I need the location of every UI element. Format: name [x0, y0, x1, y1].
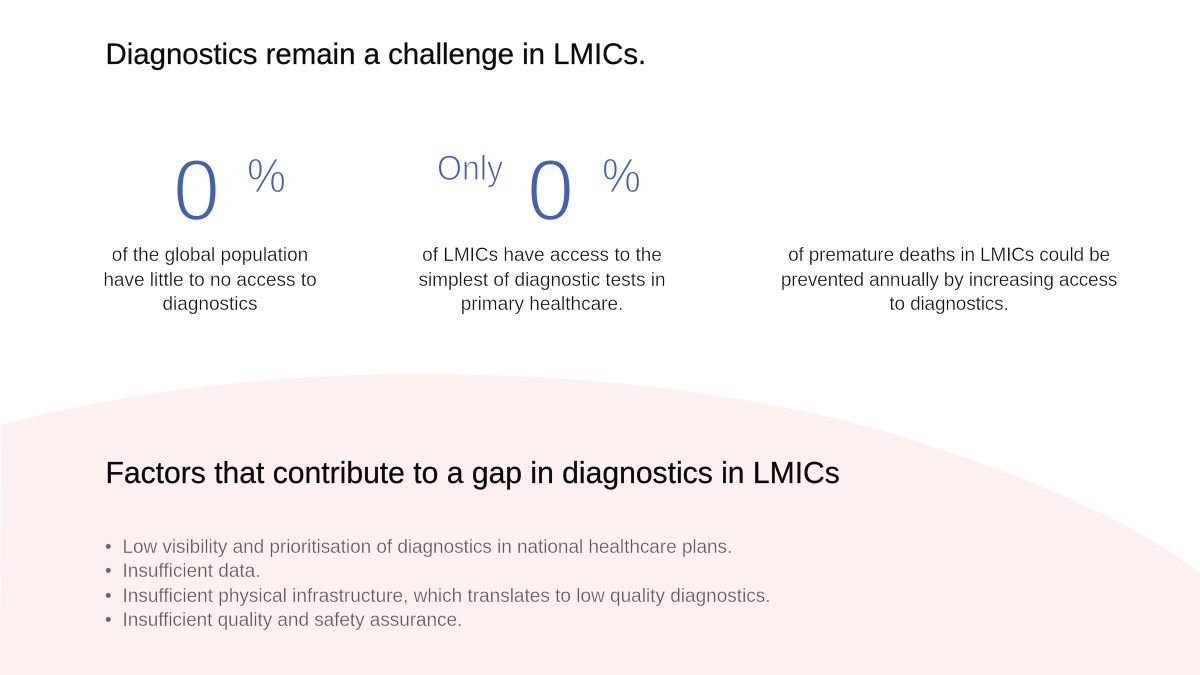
stat 2: caption: of LMICs have access to the	[422, 245, 662, 266]
stat 2: big number: Only	[437, 149, 503, 188]
bullet list: factors: •	[105, 586, 112, 606]
bullet list: factors: Insufficient data.	[122, 561, 261, 582]
heading: factors: Factors that contribute to a gap in diagnostics in LMICs	[106, 457, 840, 490]
bullet list: factors: •	[105, 536, 112, 558]
stat 1: big number	[173, 142, 286, 235]
bullet list: factors: •	[105, 610, 112, 631]
stat 3: caption: prevented annually by increasing access	[781, 270, 1117, 290]
stat 1: caption	[103, 245, 317, 315]
bullet list: factors: •	[105, 561, 112, 582]
stat 2: caption: simplest of diagnostic tests in	[418, 270, 666, 290]
bullet list: factors: Low visibility and prioritisation of diagnostics in national healthcare plans.	[122, 536, 732, 558]
stat 2: big number	[437, 142, 641, 235]
stat 2: big number: %	[602, 150, 641, 203]
stat 2: caption	[418, 245, 666, 315]
bullet list: factors: Insufficient physical infrastructure, which translates to low quality diagnostics.	[122, 586, 771, 606]
stat 1: caption: diagnostics	[162, 294, 258, 315]
stat 1: caption: of the global population	[112, 245, 308, 266]
title: Diagnostics remain a challenge in LMICs.	[106, 38, 646, 71]
stat 2: caption: primary healthcare.	[461, 294, 623, 315]
stat 1: caption: have little to no access to	[103, 270, 317, 290]
stat 3: caption: to diagnostics.	[889, 294, 1009, 315]
stat 3: caption: of premature deaths in LMICs could be	[788, 245, 1110, 266]
stat 1: big number: %	[247, 150, 286, 203]
bullet list: factors: Insufficient quality and safety assurance.	[122, 610, 462, 631]
stat 3: caption	[781, 245, 1117, 315]
bullet list: factors	[105, 536, 771, 631]
